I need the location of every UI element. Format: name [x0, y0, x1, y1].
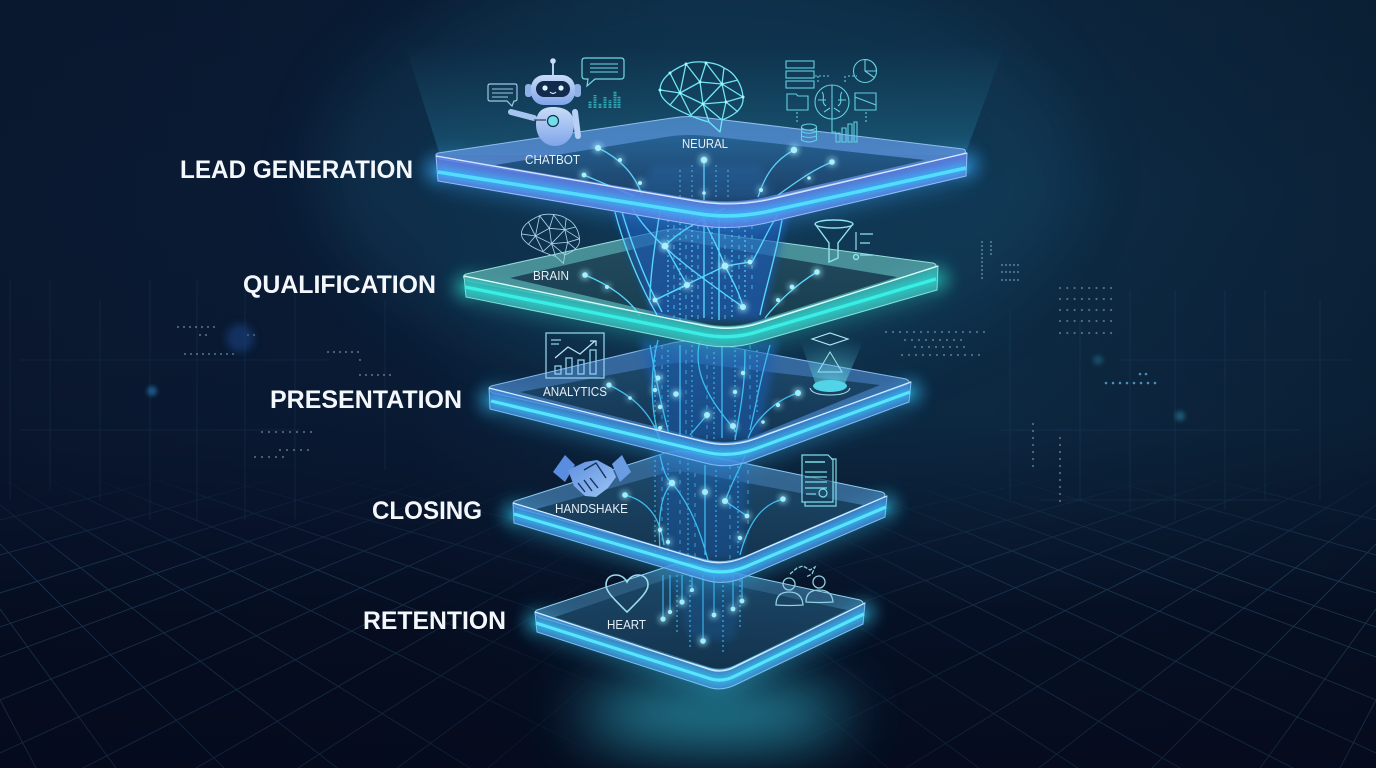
icon: chat bubbles and bars — [488, 58, 624, 108]
stage labels: CLOSING — [372, 497, 482, 525]
plate labels: ANALYTICS — [543, 384, 607, 399]
plate labels: HEART — [607, 617, 646, 632]
data stream: qualification — [582, 205, 820, 320]
icon: hologram projector — [798, 333, 866, 395]
stage labels: RETENTION — [363, 607, 506, 635]
icon: handshake — [553, 455, 631, 497]
stage labels: QUALIFICATION — [243, 271, 436, 299]
plate labels: CHATBOT — [525, 152, 580, 167]
plate: qualification — [455, 205, 948, 347]
data stream: lead generation — [582, 145, 835, 200]
icon: people conversation — [776, 566, 833, 606]
icon: brain — [521, 214, 580, 263]
plate: retention — [526, 560, 874, 689]
floor glow — [579, 684, 849, 744]
icon: contract document — [802, 455, 836, 506]
data stream: presentation — [606, 340, 801, 440]
backdrop wall lines — [10, 280, 1350, 520]
icon: data and brain dashboard — [786, 60, 876, 142]
light beams above top plate — [405, 45, 1005, 155]
icon: neural brain — [658, 62, 744, 132]
plate: presentation — [480, 340, 921, 466]
plate labels: BRAIN — [533, 268, 569, 283]
data stream: retention — [660, 560, 745, 655]
plate labels: NEURAL — [682, 136, 728, 151]
plate: closing — [504, 445, 896, 582]
icon: chatbot robot — [511, 58, 581, 146]
stage labels — [180, 156, 506, 635]
data dots right — [886, 242, 1114, 505]
plate: lead generation — [425, 116, 978, 228]
icon: funnel with sliders — [815, 220, 873, 262]
icon: heart — [606, 575, 648, 612]
data dots left — [178, 327, 395, 457]
data stream: closing — [622, 445, 786, 560]
stage labels: LEAD GENERATION — [180, 156, 413, 184]
plate labels — [525, 136, 728, 632]
stage labels: PRESENTATION — [270, 386, 462, 414]
floor grid — [0, 487, 1376, 768]
icon: analytics chart — [546, 333, 604, 378]
plate labels: HANDSHAKE — [555, 501, 628, 516]
